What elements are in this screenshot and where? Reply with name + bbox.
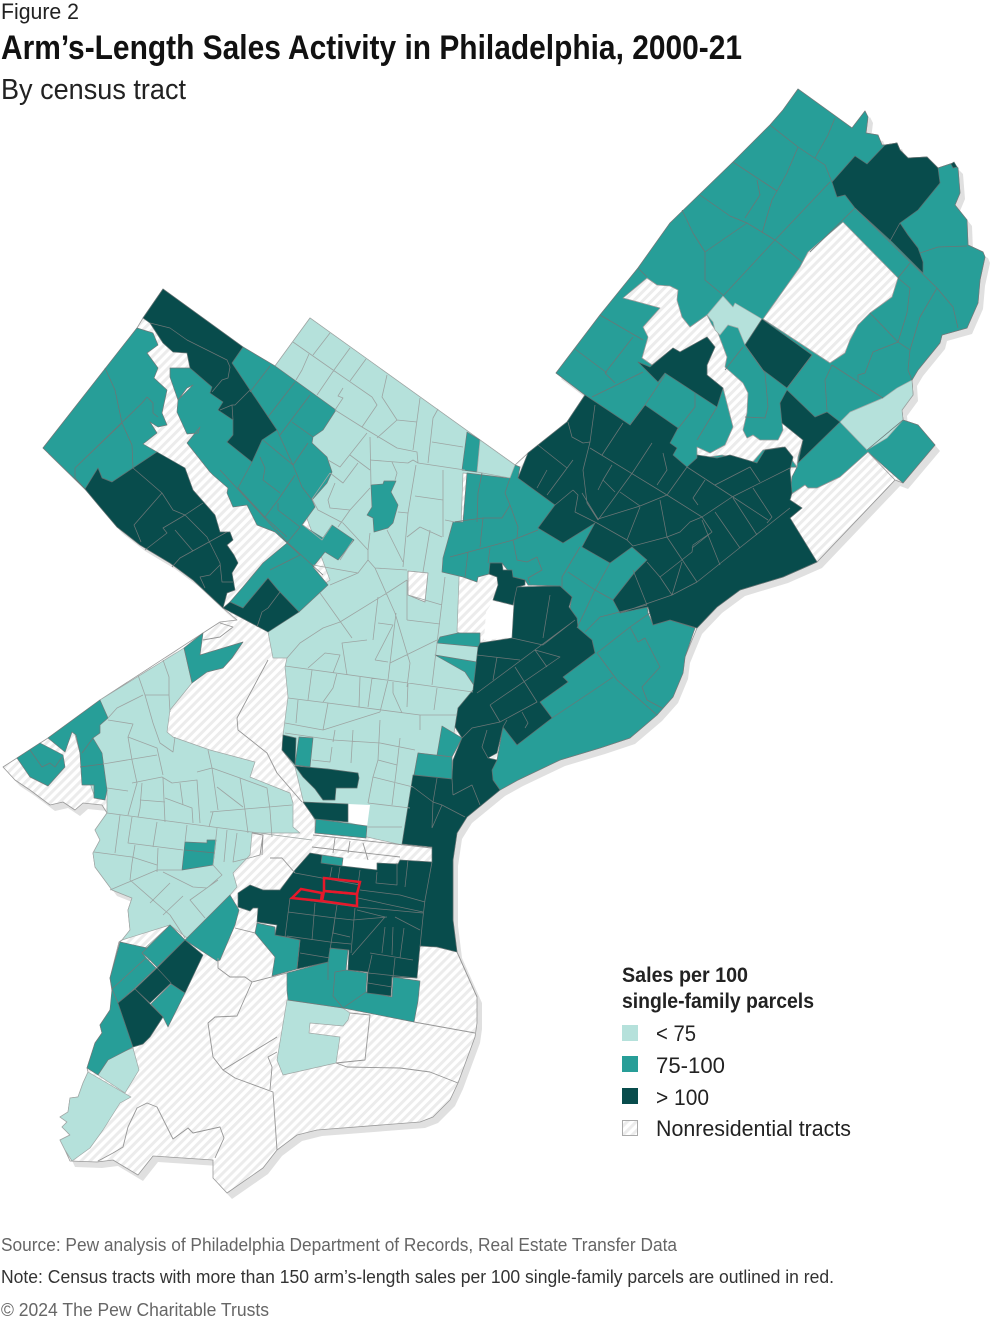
legend item: 75-100: 75-100 — [656, 1053, 725, 1078]
legend item: nonresidential: Nonresidential tracts — [656, 1116, 851, 1141]
legend title: Sales per 100 — [622, 964, 748, 987]
dark: far northwest — [85, 452, 238, 608]
tract boundaries on teal and dark — [575, 118, 967, 450]
white patches inside hatched areas — [342, 601, 513, 870]
teal: wedges near Spring Garden — [437, 633, 480, 647]
dark: southwest — [157, 940, 203, 993]
legend: single-family parcels — [622, 990, 814, 1013]
tract boundaries on light tracts — [285, 333, 473, 827]
dark: northeast middle — [638, 337, 723, 407]
note: Note: Census tracts with more than 150 arm’s-length sales per 100 single-family parcels are outlined in red. — [1, 1267, 834, 1287]
legend item: over 100 — [622, 1085, 709, 1110]
tracts under 75: central and west — [60, 318, 515, 1161]
nonresidential holes within central tracts — [348, 571, 428, 827]
dark: small block — [489, 563, 525, 605]
legend item: 75-100 — [622, 1053, 725, 1078]
tracts over 100: all dark areas — [85, 143, 957, 1047]
source: Source: Pew analysis of Philadelphia Department of Records, Real Estate Transfer Data — [1, 1235, 678, 1255]
teal: west edge — [48, 700, 108, 800]
boundaries in nonresidential areas — [98, 623, 477, 1161]
dark: Kensington through South Philadelphia — [238, 586, 595, 996]
tracts under 75: northeast — [477, 296, 913, 478]
highlighted tracts outlined in red — [292, 878, 360, 906]
legend — [622, 964, 851, 1141]
teal: northeast — [556, 89, 985, 495]
heading block — [1, 0, 742, 106]
dark: Manayunk bottom — [223, 578, 299, 632]
teal: lower northeast and river wards — [442, 465, 695, 790]
tracts 75-100: all mid-teal areas — [17, 89, 985, 1075]
legend item: under 75: < 75 — [656, 1021, 696, 1046]
dark: lower northeast cluster — [518, 395, 817, 628]
footer notes — [1, 1235, 834, 1317]
nonresidential: northeast airfield and creek — [623, 222, 898, 562]
dark: northeast top — [832, 143, 940, 273]
teal: southwest — [110, 942, 147, 989]
dark: northeast small tract tip — [951, 162, 957, 168]
dark: central fragments — [282, 735, 296, 765]
teal strip north — [462, 432, 480, 472]
legend item: over 100: > 100 — [656, 1085, 709, 1110]
legend item: under 75 — [622, 1021, 696, 1046]
teal: lower central — [437, 726, 462, 757]
teal: far northwest — [43, 328, 167, 489]
teal: south Philadelphia — [287, 948, 420, 1022]
dark: northwest top — [143, 289, 277, 462]
teal: single tract in Germantown area — [367, 481, 398, 532]
subtitle: By census tract — [1, 74, 186, 106]
teal: northwest band — [170, 347, 354, 612]
title: Arm’s-Length Sales Activity in Philadelphia, 2000-21 — [1, 29, 742, 67]
